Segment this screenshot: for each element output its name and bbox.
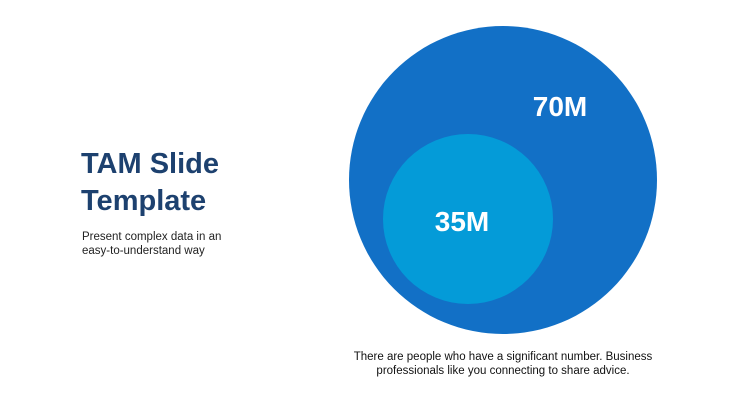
outer circle: 70M: 70M	[533, 91, 587, 122]
subtitle	[82, 231, 221, 257]
inner circle: 35M: 35M	[435, 206, 489, 237]
title: TAM Slide	[81, 148, 219, 180]
subtitle: easy-to-understand way	[82, 245, 205, 257]
caption: There are people who have a significant number. Business professionals like you connecting to share advice.	[354, 351, 652, 377]
title	[81, 148, 219, 217]
subtitle: Present complex data in an	[82, 231, 221, 243]
title: Template	[81, 185, 206, 217]
inner circle: 35M	[383, 134, 553, 304]
